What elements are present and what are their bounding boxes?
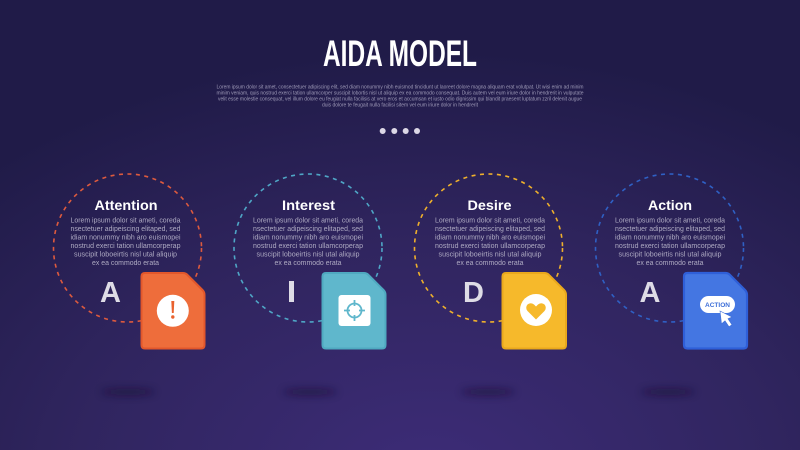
body text: nostrud exerci tation ullamcorperap bbox=[435, 241, 545, 250]
dashed circle bbox=[54, 174, 202, 322]
intro paragraph: Lorem ipsum dolor sit amet, consectetuer adipiscing elit, sed diam nonummy nibh euismod tincidunt ut laoreet dolore magna aliquam erat volutpat. Ut wisi enim ad minim bbox=[216, 84, 584, 90]
intro paragraph: velit esse molestie consequat, vel illum dolore eu feugiat nulla facilisis at vero eros et accumsan et iusto odio dignissim qui blandit praesent luptatum zzril delenit augue bbox=[218, 96, 582, 102]
title: AIDA MODEL bbox=[323, 32, 477, 74]
floor shadow bbox=[461, 388, 515, 396]
document card bbox=[142, 273, 204, 348]
intro paragraph: duis dolore te feugait nulla facilisi sitem vel eum iriure dolor in hendrerit bbox=[322, 102, 479, 108]
dashed circle bbox=[414, 174, 562, 322]
letter A: A bbox=[640, 277, 661, 309]
dashed circle bbox=[234, 174, 382, 322]
body text: suscipit loboeirtis nisl utal aliquip bbox=[256, 250, 360, 258]
body text: nostrud exerci tation ullamcorperap bbox=[70, 241, 180, 250]
floor shadow bbox=[101, 388, 155, 396]
letter D: D bbox=[463, 277, 484, 309]
body text bbox=[435, 216, 546, 267]
body text: ex ea commodo erata bbox=[456, 258, 524, 267]
body text: idiam nonummy nibh aro euismopei bbox=[435, 232, 545, 242]
body text: Lorem ipsum dolor sit ameti, coreda bbox=[253, 216, 364, 224]
letter I bbox=[289, 281, 294, 302]
body text: suscipit loboeirtis nisl utal aliquip bbox=[438, 250, 542, 258]
document card bbox=[502, 273, 566, 348]
body text: Lorem ipsum dolor sit ameti, coreda bbox=[435, 216, 546, 224]
body text: idiam nonummy nibh aro euismopei bbox=[70, 232, 181, 242]
body text: ex ea commodo erata bbox=[636, 258, 704, 267]
intro paragraph bbox=[216, 84, 584, 108]
body text bbox=[70, 216, 181, 267]
letter A: A bbox=[100, 277, 121, 309]
icon: action button with cursor: ACTION bbox=[705, 302, 731, 309]
body text: Lorem ipsum dolor sit ameti, coreda bbox=[615, 216, 726, 224]
heading: Attention bbox=[94, 197, 158, 213]
body text: ex ea commodo erata bbox=[274, 258, 342, 267]
body text: nostrud exerci tation ullamcorperap bbox=[615, 241, 725, 250]
icon: target bbox=[338, 295, 370, 326]
panel: interest bbox=[234, 174, 386, 396]
pagination dots bbox=[380, 128, 420, 134]
body text: Lorem ipsum dolor sit ameti, coreda bbox=[70, 216, 181, 224]
body text: nsectetuer adipeiscing elitaped, sed bbox=[435, 224, 545, 233]
body text: nsectetuer adipeiscing elitaped, sed bbox=[253, 224, 363, 233]
panel: action bbox=[596, 174, 747, 396]
panel: attention bbox=[54, 174, 204, 396]
body text: idiam nonummy nibh aro euismopei bbox=[253, 232, 363, 242]
document card bbox=[322, 273, 386, 348]
floor shadow bbox=[283, 388, 337, 396]
document card bbox=[684, 273, 747, 348]
body text bbox=[615, 216, 726, 267]
body text: nsectetuer adipeiscing elitaped, sed bbox=[615, 224, 725, 233]
body text: nsectetuer adipeiscing elitaped, sed bbox=[70, 224, 180, 233]
floor shadow bbox=[641, 388, 695, 396]
body text: suscipit loboeirtis nisl utal aliquip bbox=[74, 250, 177, 258]
heading: Desire bbox=[468, 197, 512, 213]
icon: exclamation bbox=[157, 295, 189, 327]
intro paragraph: minim veniam, quis nostrud exerci tation ullamcorper suscipit lobortis nisl ut aliquip ex ea commodo consequat. Duis autem vel eum iriure dolor in hendrerit in vulputate bbox=[216, 90, 584, 96]
body text: ex ea commodo erata bbox=[92, 258, 160, 267]
icon: heart bbox=[520, 294, 552, 326]
icon: action button with cursor bbox=[700, 296, 735, 327]
body text: nostrud exerci tation ullamcorperap bbox=[253, 241, 363, 250]
panel: desire bbox=[414, 174, 566, 396]
body text: suscipit loboeirtis nisl utal aliquip bbox=[618, 250, 722, 258]
body text: idiam nonummy nibh aro euismopei bbox=[615, 232, 725, 242]
heading: Action bbox=[648, 197, 692, 213]
dashed circle bbox=[596, 174, 744, 322]
heading: Interest bbox=[282, 197, 335, 213]
body text bbox=[253, 216, 364, 267]
